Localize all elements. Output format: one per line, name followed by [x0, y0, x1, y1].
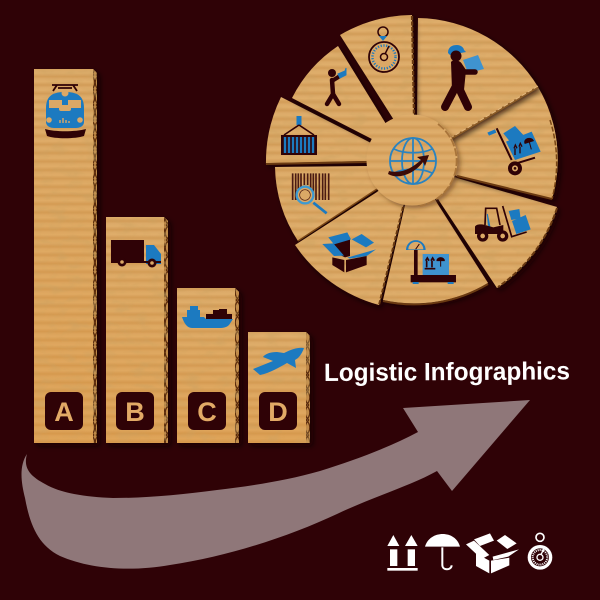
label D — [259, 392, 297, 430]
panel: cardboard wheel — [266, 15, 558, 305]
label A: A — [54, 397, 74, 427]
label C — [188, 392, 226, 430]
title: Logistic Infographics — [324, 357, 570, 387]
slice: barcode — [275, 160, 414, 241]
icon: cargo ship — [182, 306, 233, 328]
icon: barcode magnifier — [293, 173, 329, 213]
label B — [116, 392, 154, 430]
bar B — [106, 217, 168, 443]
slice: forklift — [414, 160, 557, 288]
icon: man with megaphone — [327, 68, 346, 104]
slice: stopwatch — [340, 15, 414, 160]
icon: open box white — [466, 533, 519, 573]
hub — [366, 114, 458, 206]
label C: C — [197, 397, 217, 427]
icon: crane container — [281, 116, 317, 155]
icon: this way up — [387, 535, 418, 571]
slice: open box — [295, 160, 414, 305]
label D: D — [268, 397, 288, 427]
label A — [45, 392, 83, 430]
slice: scale — [383, 160, 488, 304]
icon: hand cart — [487, 126, 541, 175]
icon: umbrella — [425, 534, 460, 569]
icon: stopwatch — [369, 27, 399, 72]
label B: B — [125, 397, 145, 427]
icon: globe with arrow — [388, 138, 436, 184]
icon: stopwatch white — [528, 533, 552, 570]
slice: megaphone — [292, 46, 414, 160]
icon: train — [45, 85, 86, 138]
bar D — [248, 332, 310, 443]
bar A — [34, 69, 97, 443]
icon: truck — [111, 240, 161, 268]
gray swoosh arrow — [22, 400, 530, 569]
icon: forklift — [475, 206, 531, 242]
slice: hand cart — [414, 87, 558, 199]
icon: open box — [322, 232, 376, 272]
bar chart — [34, 69, 310, 443]
white icon row — [387, 533, 552, 573]
slice: worker — [414, 18, 538, 160]
icon: worker carrying box — [445, 45, 484, 107]
icon: airplane — [253, 348, 304, 375]
icon: weighing scale — [406, 240, 456, 284]
bar C — [177, 288, 239, 443]
slice: container — [266, 97, 414, 165]
